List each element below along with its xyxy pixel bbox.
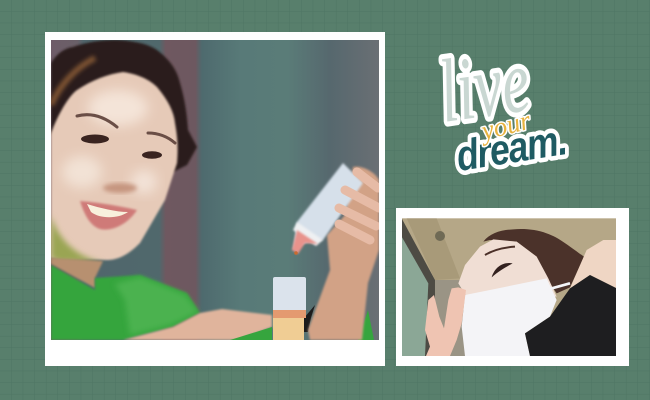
- eyebrows: [77, 115, 175, 143]
- neck: [51, 258, 103, 288]
- word: your: your: [475, 105, 534, 147]
- right sleeve: [358, 310, 374, 340]
- cup liquid: [273, 310, 306, 318]
- face: [458, 239, 557, 297]
- left cheek highlight: [62, 156, 102, 188]
- black watch strap: [303, 305, 315, 332]
- ceiling side: [407, 218, 460, 280]
- hair streaks: [51, 58, 95, 105]
- bottle white band: [293, 222, 323, 246]
- panel: large photo frame: [45, 32, 385, 366]
- forehead highlight: [88, 90, 148, 126]
- window frame: [402, 218, 435, 356]
- sticker: live your dream: [433, 30, 570, 181]
- green top shoulder highlight: [115, 277, 198, 335]
- panel: small photo frame: [396, 208, 629, 366]
- word: dream: dream.: [453, 116, 570, 181]
- measuring cup: [273, 277, 306, 310]
- eyebrow: [485, 247, 515, 255]
- droplet: [294, 251, 298, 255]
- green sleeve under hand: [230, 327, 272, 340]
- left forearm and hand: [123, 309, 272, 340]
- eyes: [81, 134, 162, 159]
- raised arm: [570, 240, 617, 288]
- right arm and hand: [308, 167, 379, 340]
- hair: [483, 229, 584, 293]
- ceiling: [402, 218, 617, 357]
- jaw green reflection: [51, 216, 98, 261]
- word: live core: live: [433, 30, 535, 142]
- photo: woman with dropper bottle: [51, 40, 379, 340]
- lamp: [435, 231, 445, 241]
- mask: [462, 278, 557, 356]
- fingers: [339, 172, 379, 240]
- hand: [425, 287, 466, 356]
- hair: [51, 40, 197, 172]
- photo: woman in mask: [402, 218, 617, 357]
- nose shadow: [103, 183, 137, 193]
- right cheek highlight: [131, 170, 157, 194]
- green top: [51, 265, 200, 340]
- bottle liquid: [292, 230, 318, 254]
- cup base: [273, 318, 304, 340]
- word: live: live: [433, 30, 535, 142]
- wall: [435, 280, 467, 356]
- black garment: [525, 275, 617, 356]
- teeth: [87, 204, 128, 217]
- mask strap: [548, 283, 570, 289]
- dropper bottle: [293, 163, 363, 250]
- eye: [492, 263, 513, 277]
- mouth: [80, 201, 137, 230]
- face and neck-side: [51, 72, 178, 260]
- window glass: [402, 237, 428, 356]
